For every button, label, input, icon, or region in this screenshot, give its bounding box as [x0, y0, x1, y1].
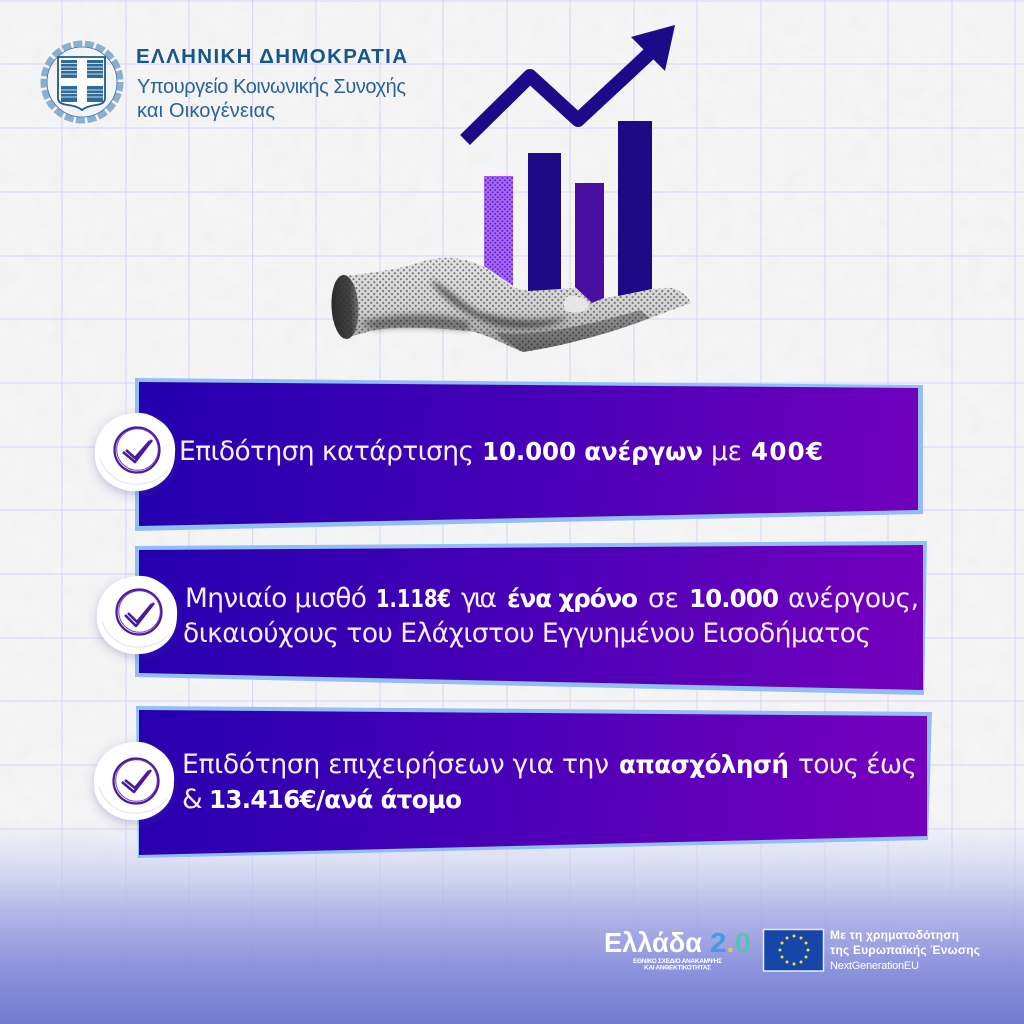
text: monthly salary: 1.118€ [376, 584, 451, 613]
panel: monthly salary [97, 541, 927, 695]
logo: Greece 2.0 [604, 927, 751, 972]
EU funding text: της Ευρωπαϊκής Ένωσης [830, 943, 980, 957]
EU funding text: NextGenerationEU [830, 960, 919, 972]
text: business subsidy: Επιδότηση επιχειρήσεων για την [182, 749, 609, 780]
panel: training subsidy [95, 378, 923, 531]
ministry heading [136, 45, 407, 122]
ministry heading: Υπουργείο Κοινωνικής Συνοχής [137, 76, 406, 98]
logo: Greece 2.0: ΚΑΙ ΑΝΘΕΚΤΙΚΟΤΗΤΑΣ [644, 964, 711, 972]
ministry heading: και Οικογένειας [137, 100, 275, 122]
text: monthly salary: 10.000 [689, 584, 779, 613]
logo: Greece 2.0: Ελλάδα [604, 927, 702, 958]
icon: check badge 1 [95, 413, 175, 491]
panel: business subsidy [94, 706, 932, 858]
logo: Greece 2.0: 2.0 [710, 927, 751, 958]
text: monthly salary [183, 583, 919, 649]
text: training subsidy: με [711, 436, 742, 467]
text: monthly salary: ανέργους, [788, 583, 919, 614]
text: business subsidy [182, 749, 917, 815]
illustration: hand holding rising bar chart [330, 25, 691, 352]
text: business subsidy: απασχόλησή [619, 750, 789, 779]
logo: Greece 2.0: ΕΘΝΙΚΟ ΣΧΕΔΙΟ ΑΝΑΚΑΜΨΗΣ [633, 958, 722, 965]
icon: check badge 3 [94, 742, 174, 820]
text: monthly salary: για [461, 583, 497, 614]
icon: halftone open hand [330, 258, 691, 352]
EU funding text [830, 928, 980, 972]
text: training subsidy: Επιδότηση κατάρτισης [179, 436, 474, 467]
EU funding text: Με τη χρηματοδότηση [830, 928, 959, 942]
text: business subsidy: 13.416€/ανά άτομο [209, 785, 462, 814]
text: training subsidy [179, 436, 823, 467]
text: training subsidy: 10.000 ανέργων [482, 437, 703, 466]
text: monthly salary: δικαιούχους του Ελάχιστου Εγγυημένου Εισοδήματος [183, 618, 871, 649]
icon: check badge 2 [97, 576, 177, 654]
text: business subsidy: τους έως [798, 749, 917, 780]
icon: EU flag [764, 930, 824, 971]
ministry heading: ΕΛΛΗΝΙΚΗ ΔΗΜΟΚΡΑΤΙΑ [136, 45, 407, 68]
text: monthly salary: ένα χρόνο [507, 584, 638, 613]
icon: rising trend arrow [465, 25, 675, 140]
text: business subsidy: & [182, 784, 203, 815]
logo: Hellenic Republic emblem [44, 44, 120, 120]
text: monthly salary: Μηνιαίο μισθό [185, 583, 367, 614]
bar chart [484, 121, 652, 303]
text: monthly salary: σε [648, 583, 679, 614]
text: training subsidy: 400€ [751, 437, 823, 466]
